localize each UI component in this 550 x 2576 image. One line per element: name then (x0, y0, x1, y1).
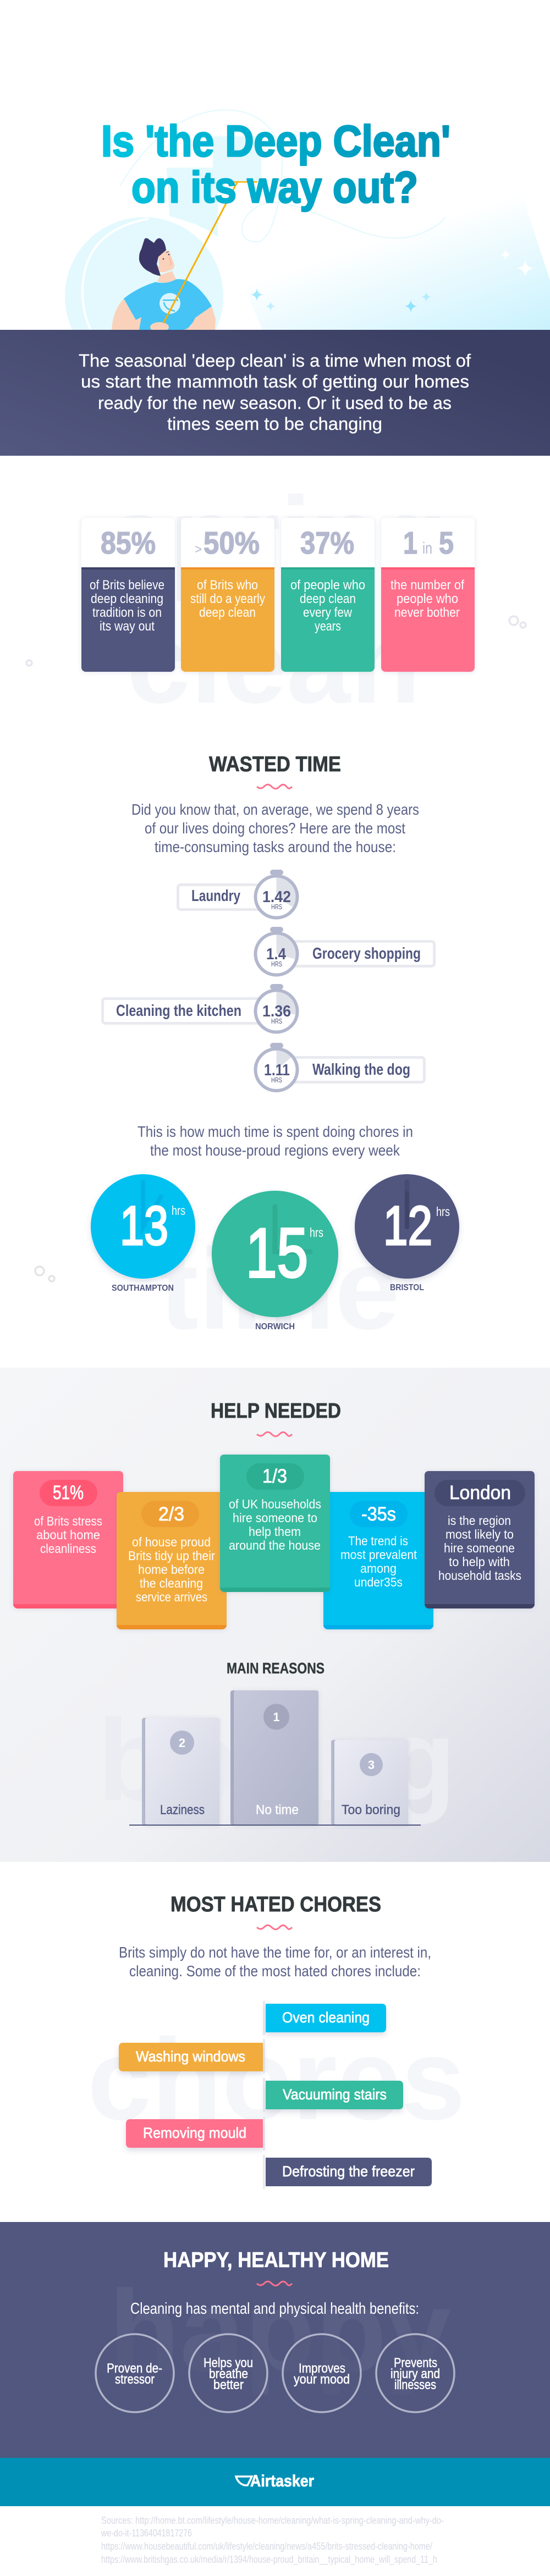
card: 2/3: of house proud (132, 1535, 211, 1549)
card: 1 in 5: people who (397, 592, 458, 606)
card: -35s: The trend is (348, 1534, 408, 1548)
card: -35s: among (360, 1561, 397, 1576)
card: London: hire someone (444, 1541, 515, 1555)
benefit: prevents injury and illnesses: Prevents (394, 2356, 437, 2370)
clock: bristol: hrs (436, 1204, 450, 1219)
bar: no time: No time (256, 1803, 299, 1817)
card: 1 in 5: the number of (391, 578, 464, 593)
sparkles (250, 249, 535, 313)
intro text: times seem to be changing (167, 414, 382, 434)
benefit: helps you breathe better: better (213, 2378, 244, 2392)
regions intro text: This is how much time is spent doing chores in (138, 1123, 413, 1140)
watermark: spring clean (107, 473, 447, 727)
clock: bristol (355, 1174, 459, 1292)
card: -35s: most prevalent (340, 1547, 417, 1562)
chore: removing mould: Removing mould (143, 2125, 246, 2141)
benefit: proven de-stressor (96, 2334, 174, 2412)
heading: main reasons: MAIN REASONS (227, 1660, 324, 1677)
panel: help cards (13, 1455, 535, 1629)
chore: defrosting the freezer (266, 2158, 432, 2186)
squiggle (257, 784, 292, 789)
spray bottle background (65, 110, 550, 375)
card: 85%: its way out (100, 619, 155, 634)
card: London: is the region (448, 1513, 511, 1528)
kitchen stopwatch: HRS (271, 1017, 282, 1025)
clock: bristol: BRISTOL (390, 1283, 424, 1292)
chores intro text: Brits simply do not have the time for, or an interest in, (119, 1944, 431, 1961)
card: 2/3 (117, 1492, 227, 1629)
card: 85%: deep cleaning (91, 592, 163, 606)
kitchen stopwatch (102, 984, 297, 1032)
card: 85%: of Brits believe (90, 578, 164, 593)
card: London: London (449, 1482, 511, 1503)
grocery stopwatch: 1.4 (266, 946, 286, 963)
bar: laziness (142, 1718, 219, 1825)
card: 2/3: Brits tidy up their (128, 1549, 215, 1563)
chore: oven cleaning (266, 2004, 386, 2032)
card: 51%: cleanliness (40, 1541, 96, 1556)
grocery stopwatch: HRS (271, 960, 282, 968)
chore: oven cleaning: Oven cleaning (282, 2009, 370, 2026)
chore: defrosting the freezer: Defrosting the freezer (282, 2163, 415, 2180)
logo wordmark: Airtasker (250, 2472, 314, 2490)
podium chart (129, 1690, 421, 1826)
heading: help needed: HELP NEEDED (211, 1400, 341, 1423)
laundry stopwatch: 1.42 (262, 888, 291, 906)
kitchen stopwatch: 1.36 (262, 1003, 291, 1020)
card: 37% (281, 518, 375, 672)
bar: too boring: 3 (368, 1758, 375, 1772)
chore: washing windows: Washing windows (136, 2048, 245, 2065)
benefit: prevents injury and illnesses: injury and (391, 2367, 440, 2381)
sources: Sources: http://home.bt.com/lifestyle/house-home/cleaning/what-is-spring-cleaning-and-why-do- (101, 2515, 444, 2526)
clock: norwich (212, 1191, 338, 1331)
card: 1/3 (220, 1455, 330, 1592)
walking stopwatch: Walking the dog (312, 1061, 410, 1079)
card: 85%: 85% (101, 526, 156, 561)
squiggle (257, 1925, 292, 1930)
wasted time intro text (131, 801, 419, 855)
grocery stopwatch: Grocery shopping (312, 945, 421, 963)
watermark: chores: chores (87, 2015, 465, 2144)
bar: too boring (331, 1740, 408, 1825)
bubbles (26, 616, 526, 666)
watermark: time: time (160, 1224, 400, 1353)
clock: bristol: 12 (383, 1195, 432, 1257)
card: London: to help with (449, 1555, 510, 1569)
card: -35s: under35s (354, 1575, 403, 1589)
sources: https://www.housebeautiful.com/uk/lifestyle/cleaning/news/a455/brits-stressed-cleaning-home/ (101, 2541, 432, 2552)
card: 51%: 51% (53, 1482, 84, 1503)
benefit: proven de-stressor: stressor (115, 2372, 155, 2387)
card: 37%: of people who (290, 578, 365, 593)
card: >50%: deep clean (199, 605, 256, 620)
card: 1/3: hire someone to (233, 1511, 317, 1525)
card: >50%: still do a yearly (190, 592, 265, 606)
intro text: us start the mammoth task of getting our homes (81, 372, 469, 391)
squiggle (257, 1432, 292, 1436)
benefits intro text: Cleaning has mental and physical health benefits: (130, 2300, 419, 2318)
clock: southampton: SOUTHAMPTON (112, 1284, 174, 1293)
wasted time intro text: of our lives doing chores? Here are the most (145, 820, 405, 837)
title (101, 117, 450, 212)
bar: too boring: Too boring (342, 1803, 400, 1817)
card: 51%: of Brits stress (34, 1514, 102, 1528)
benefit: improves your mood: Improves (299, 2361, 345, 2376)
icon: airtasker wing (236, 2477, 252, 2485)
card: -35s: -35s (361, 1503, 396, 1525)
panel: help needed background (0, 1368, 550, 1862)
card: 1/3: around the house (229, 1538, 321, 1552)
card: 85% (81, 518, 175, 672)
card: 1/3: 1/3 (262, 1466, 287, 1487)
benefit: helps you breathe better: breathe (209, 2367, 248, 2381)
chores intro text (119, 1944, 431, 1980)
card: 37%: deep clean (300, 592, 356, 606)
benefit: improves your mood: your mood (294, 2372, 350, 2387)
clock: norwich: hrs (310, 1225, 323, 1240)
heading: happy healthy home: HAPPY, HEALTHY HOME (163, 2248, 389, 2272)
sources: we-do-it-11364041817276 (101, 2528, 192, 2539)
walking stopwatch (255, 1043, 425, 1091)
benefit: prevents injury and illnesses (376, 2334, 454, 2412)
bubbles (35, 1267, 54, 1281)
watermark: boring: boring (97, 1695, 456, 1825)
chore: vacuuming stairs (266, 2081, 403, 2109)
card: >50%: > (195, 542, 202, 557)
bar: no time: 1 (273, 1710, 280, 1724)
card: London: household tasks (438, 1568, 521, 1583)
benefit: improves your mood (283, 2334, 361, 2412)
laundry stopwatch: HRS (271, 903, 282, 911)
regions intro text (138, 1123, 413, 1159)
chores list (119, 2001, 432, 2189)
clock: southampton: 13 (120, 1195, 168, 1257)
clock: southampton (91, 1174, 195, 1293)
card: London: most likely to (446, 1527, 514, 1541)
hero illustration (65, 110, 550, 375)
chore: removing mould (126, 2119, 263, 2148)
footer band with logo (0, 2458, 550, 2506)
benefit: proven de-stressor: Proven de- (107, 2361, 162, 2376)
card: 37%: 37% (300, 526, 354, 561)
card: 1/3: help them (249, 1524, 301, 1539)
benefit: prevents injury and illnesses: illnesses (394, 2378, 436, 2392)
bar: laziness: 2 (179, 1736, 185, 1750)
card: 2/3: service arrives (136, 1590, 207, 1604)
heading: most hated chores: MOST HATED CHORES (170, 1893, 381, 1916)
sources (101, 2515, 444, 2566)
card: 51% (13, 1471, 123, 1608)
title: on its way out? (131, 163, 418, 212)
watermark: spring clean: clean (127, 598, 421, 727)
card: 1 in 5: 1 (403, 526, 417, 561)
bar: laziness: Laziness (160, 1803, 205, 1817)
laundry stopwatch: Laundry (191, 887, 240, 905)
card: 1/3: of UK households (229, 1497, 321, 1511)
title: Is 'the Deep Clean' (101, 117, 450, 165)
card: >50%: of Brits who (197, 578, 258, 593)
intro text: The seasonal 'deep clean' is a time when most of (79, 351, 471, 371)
heading: wasted time: WASTED TIME (209, 753, 341, 776)
squiggle (257, 2281, 292, 2286)
card: 2/3: the cleaning (140, 1576, 203, 1590)
card: London (425, 1471, 535, 1608)
laundry stopwatch (178, 870, 297, 918)
card: >50% (181, 518, 274, 672)
card: 37%: every few (303, 605, 353, 620)
intro text: ready for the new season. Or it used to be as (98, 393, 452, 413)
wasted time intro text: time-consuming tasks around the house: (155, 838, 396, 855)
card: 1 in 5: in (422, 539, 432, 557)
walking stopwatch: 1.11 (264, 1062, 290, 1079)
watermark: spring clean: spring (107, 473, 447, 602)
chore: washing windows (119, 2043, 263, 2071)
card: >50%: 50% (204, 526, 260, 561)
sources: https://www.britishgas.co.uk/media/r/1394/house-proud_britain__typical_home_will_spend_11_h (101, 2554, 437, 2566)
card: 2/3: home before (138, 1562, 205, 1577)
clock: norwich: NORWICH (255, 1322, 295, 1331)
chore: vacuuming stairs: Vacuuming stairs (283, 2086, 387, 2103)
person holding mop (112, 181, 257, 332)
clock: southampton: hrs (172, 1203, 185, 1218)
kitchen stopwatch: Cleaning the kitchen (116, 1002, 241, 1020)
card: 85%: tradition is on (92, 605, 162, 620)
panel: stat cards (81, 518, 475, 672)
benefit: helps you breathe better: Helps you (204, 2356, 253, 2370)
card: 1 in 5: never bother (394, 605, 460, 620)
intro text (79, 351, 471, 434)
benefit: helps you breathe better (189, 2334, 267, 2412)
card: 2/3: 2/3 (158, 1503, 184, 1525)
card: 37%: years (315, 619, 341, 634)
card: 51%: about home (36, 1528, 100, 1542)
walking stopwatch: HRS (271, 1076, 282, 1084)
grocery stopwatch (255, 927, 435, 975)
card: 1 in 5: 5 (439, 526, 454, 561)
intro banner (0, 330, 550, 456)
stopwatch chart (102, 870, 435, 1091)
chores intro text: cleaning. Some of the most hated chores include: (129, 1963, 421, 1980)
bar: no time (230, 1690, 318, 1825)
card: 1 in 5 (381, 518, 475, 672)
card: -35s (323, 1492, 433, 1629)
panel: happy healthy home (0, 2222, 550, 2458)
regions intro text: the most house-proud regions every week (150, 1142, 400, 1159)
watermark: happy: happy (109, 2266, 451, 2395)
wasted time intro text: Did you know that, on average, we spend 8 years (131, 801, 419, 818)
clock: norwich: 15 (246, 1214, 308, 1292)
